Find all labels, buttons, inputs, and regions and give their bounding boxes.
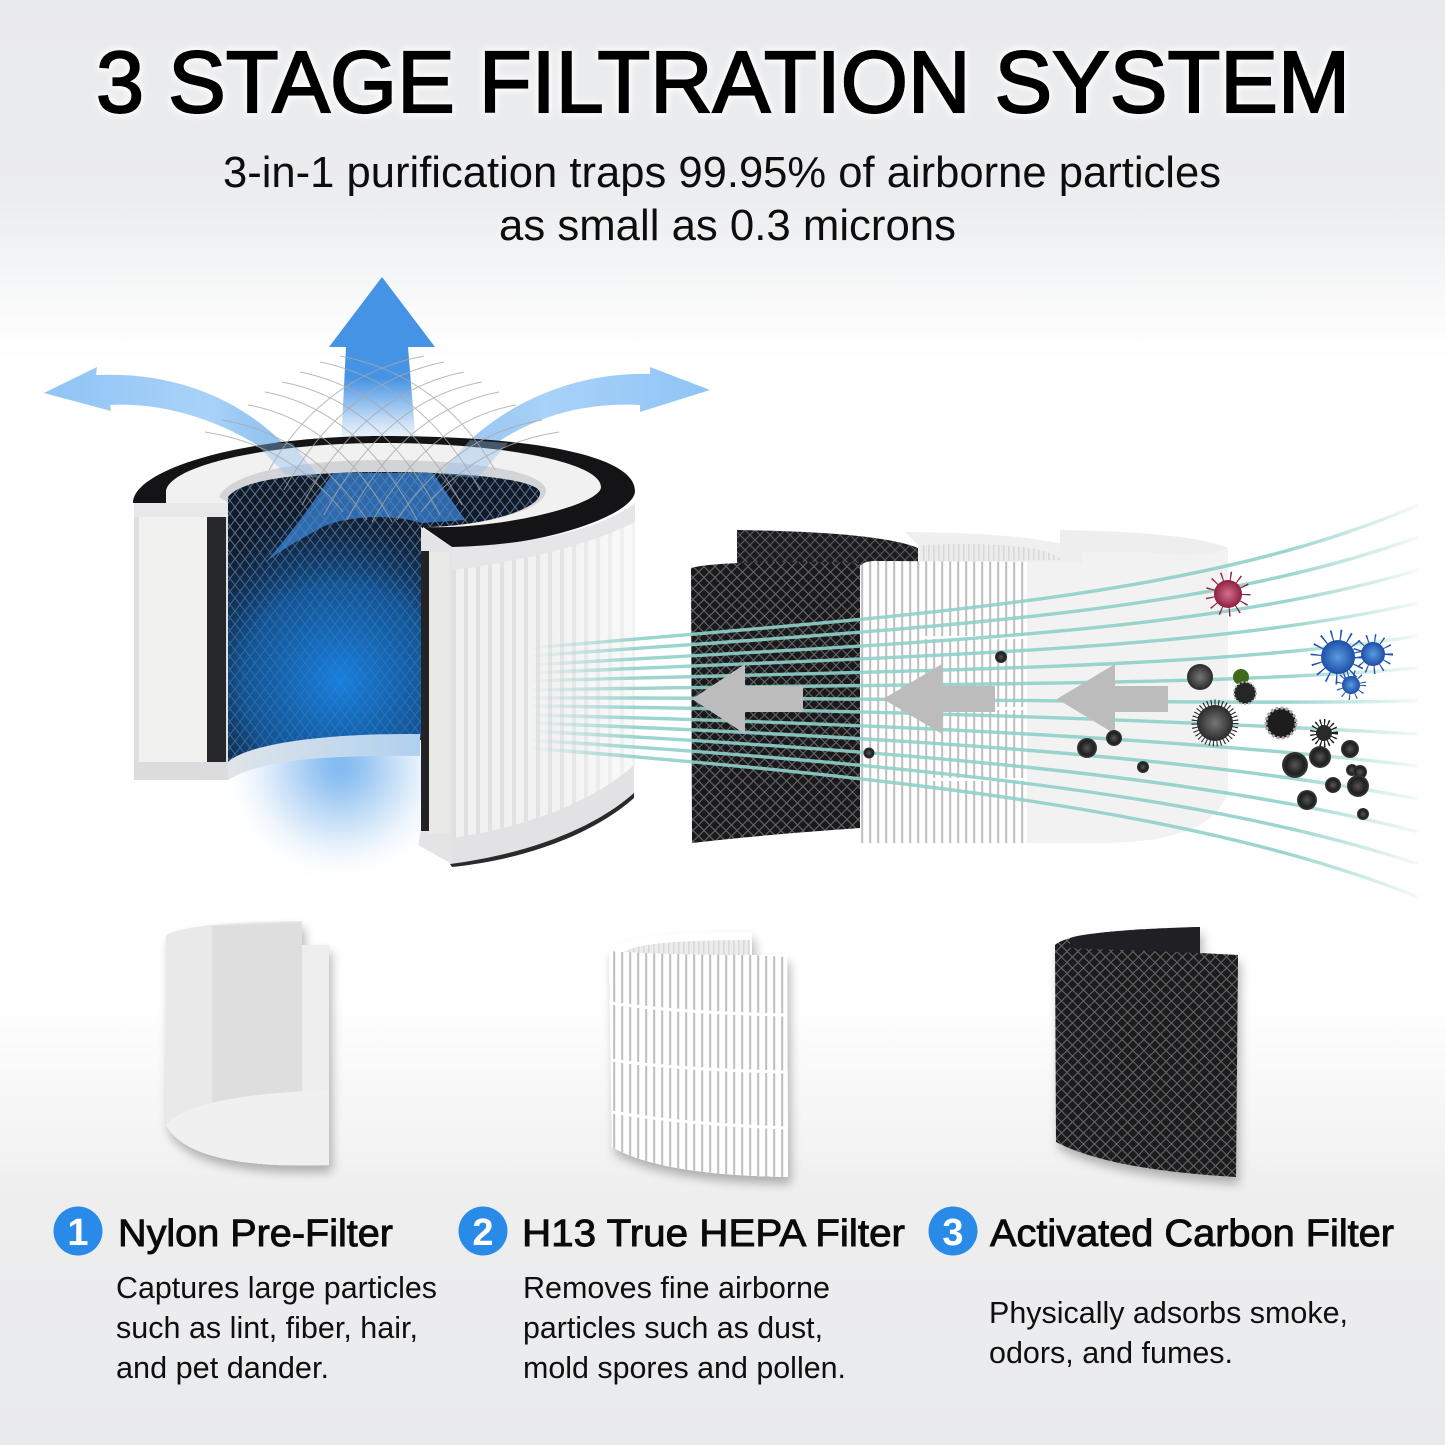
heading: Nylon Pre-Filter (118, 1213, 393, 1255)
arrow: left outflow (44, 367, 285, 448)
blue interior light (228, 472, 540, 763)
nylon filter front (1027, 548, 1228, 843)
arrow: upward outflow (329, 277, 435, 445)
side arrow tails over the ring (255, 440, 508, 478)
icon: green mold spore (1233, 669, 1249, 685)
panel: nylon pre-filter (54, 1206, 437, 1385)
panel: H13 true HEPA filter (458, 1206, 905, 1385)
heading: Activated Carbon Filter (990, 1213, 1394, 1255)
description: such as lint, fiber, hair, (116, 1310, 418, 1345)
subtitle: 3-in-1 purification traps 99.95% of airborne particles (223, 148, 1221, 197)
arrow: through HEPA filter (883, 664, 995, 734)
inner bottom band (228, 734, 420, 780)
description (523, 1270, 846, 1385)
description (989, 1295, 1348, 1370)
airflow arrows: clean air leaving the filter (44, 277, 710, 448)
white top ring (166, 443, 601, 527)
icon: grey spiky spores (1187, 664, 1334, 743)
description: Removes fine airborne (523, 1270, 830, 1305)
illustration: carbon filter sheet (1055, 927, 1238, 1177)
icon: red virus (1211, 577, 1245, 611)
right outer pleated wall (450, 503, 635, 867)
description: Captures large particles (116, 1270, 437, 1305)
illustration: HEPA filter sheet (609, 932, 788, 1177)
arrow: right outflow (470, 367, 710, 446)
badge 2: 2 (472, 1212, 494, 1254)
description (116, 1270, 437, 1385)
right cut face (418, 527, 452, 864)
left cut face (134, 503, 228, 780)
HEPA filter front (860, 561, 1027, 843)
ring inner lip (219, 460, 546, 527)
icon: dark spore (1234, 682, 1256, 704)
description: particles such as dust, (523, 1310, 823, 1345)
blue glow on floor (210, 727, 460, 863)
HEPA filter back (905, 532, 1082, 575)
illustration: layered filter sheets (691, 530, 1228, 843)
nylon filter back (1060, 530, 1228, 575)
arrow: through nylon filter (1057, 664, 1168, 734)
illustration: cut-away filter cylinder (133, 356, 635, 867)
subtitle: as small as 0.3 microns (499, 201, 956, 250)
description: mold spores and pollen. (523, 1350, 846, 1385)
description: and pet dander. (116, 1350, 329, 1385)
icon: blue viruses (1317, 636, 1388, 696)
carbon filter back (737, 530, 918, 575)
black top seal (133, 436, 635, 547)
inner blue swoosh arrow (265, 473, 465, 563)
inner carbon mesh wall (228, 472, 540, 765)
subtitle (223, 148, 1221, 250)
arrow: through carbon filter (692, 664, 803, 734)
title: 3 STAGE FILTRATION SYSTEM (96, 34, 1350, 131)
panel: activated carbon filter (928, 1206, 1394, 1370)
badge 3 (928, 1206, 978, 1256)
description: odors, and fumes. (989, 1335, 1233, 1370)
badge 1 (54, 1206, 102, 1256)
description: Physically adsorbs smoke, (989, 1295, 1348, 1330)
honeycomb dome of airflow lines (205, 356, 559, 522)
carbon filter front (691, 562, 860, 843)
badge 2 (458, 1206, 508, 1256)
icon: dust particles (864, 651, 1369, 820)
badge 1: 1 (67, 1212, 89, 1254)
icons: viruses and particles (864, 577, 1388, 820)
heading: H13 True HEPA Filter (522, 1213, 905, 1255)
illustration: nylon pre-filter sheet (166, 921, 329, 1166)
badge 3: 3 (942, 1212, 964, 1254)
airflow lines: teal air stream through filters (530, 505, 1418, 897)
